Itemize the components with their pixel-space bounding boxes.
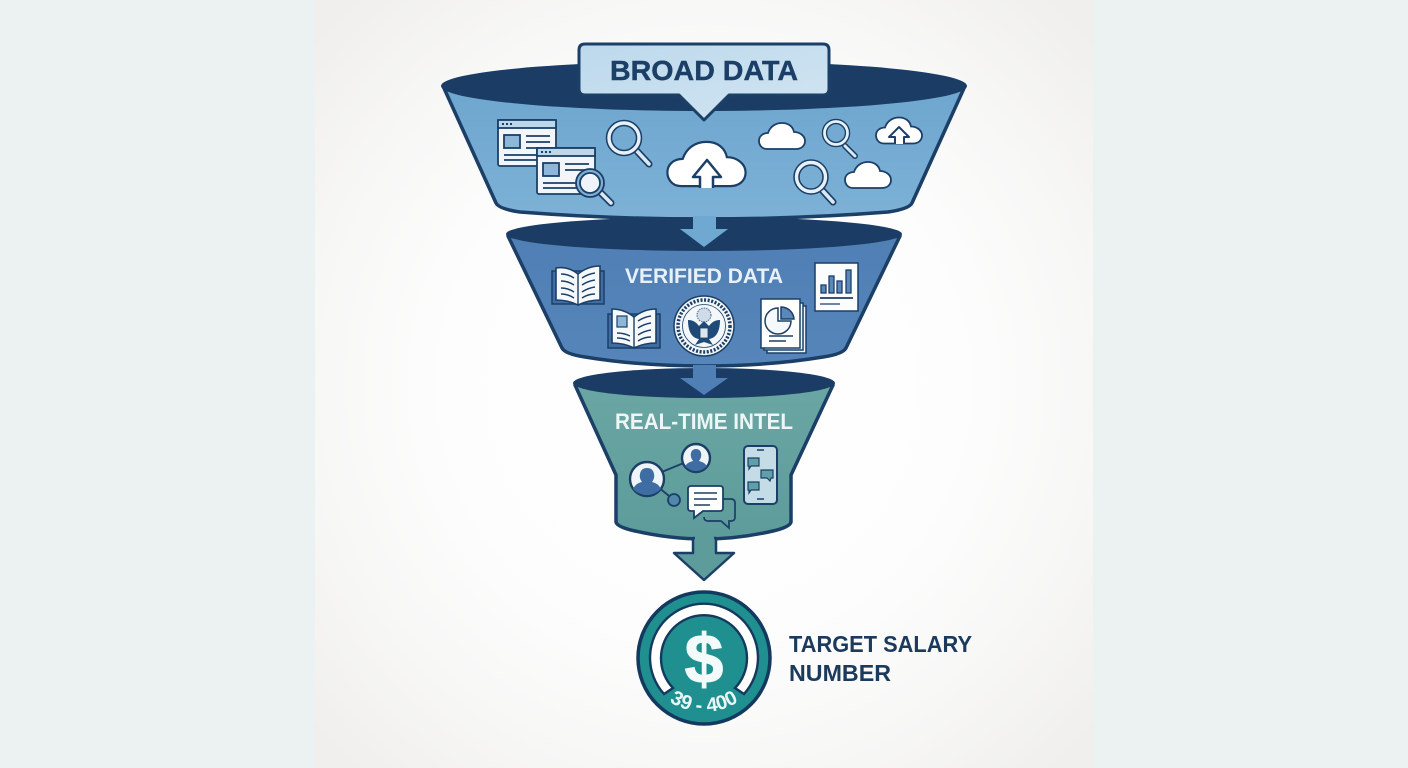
icon: small magnifier: [824, 122, 855, 156]
arrow: broad to verified: [680, 216, 728, 247]
icon: phone with messages: [744, 446, 777, 504]
arrow: verified to real-time: [680, 365, 728, 395]
funnel opening: verified data: [506, 217, 902, 251]
panel: verified data funnel: [506, 216, 902, 366]
range text path: [662, 697, 746, 712]
dollar sign: $: [685, 620, 723, 698]
range value: 39 - 400: [670, 691, 736, 712]
label: broad data: [579, 44, 829, 120]
panel: real-time intel funnel: [573, 365, 835, 539]
icon: bar chart document: [815, 263, 858, 311]
icon: small cloud: [759, 123, 805, 149]
icon: lower cloud: [845, 162, 891, 188]
icon: large upload cloud: [667, 142, 746, 188]
label: target salary number: NUMBER: [789, 660, 891, 686]
cover for arrow top seam: [695, 534, 714, 556]
icon: open book with figure: [608, 309, 660, 348]
funnel body: broad data: [443, 86, 965, 219]
label: target salary number: TARGET SALARY: [789, 631, 972, 657]
funnel body: verified data: [508, 236, 900, 366]
heading: verified data: VERIFIED DATA: [625, 265, 783, 288]
icon: government seal: [674, 296, 734, 356]
heading: real-time intel: REAL-TIME INTEL: [615, 409, 793, 434]
funnel body: real-time intel: [575, 385, 833, 539]
icon: magnifier lower: [796, 162, 833, 202]
icon: magnifier on browser: [576, 169, 611, 203]
icon: magnifier: [609, 123, 649, 164]
gauge ring: [650, 604, 758, 694]
icon: connected people: [630, 444, 710, 506]
icon: pie chart document: [761, 299, 806, 353]
panel: broad data funnel: [441, 61, 967, 219]
funnel opening: broad data: [441, 61, 967, 111]
icon: browser windows: [498, 120, 595, 194]
funnel opening: real-time intel: [573, 368, 835, 398]
label: target salary number: [789, 631, 972, 686]
badge: target salary: [636, 590, 772, 726]
icon: open book: [552, 266, 604, 305]
icon: chat bubbles: [688, 486, 735, 528]
label: broad data: BROAD DATA: [610, 55, 798, 86]
icon: small upload cloud: [876, 118, 922, 144]
arrow: real-time to target: [674, 538, 734, 580]
